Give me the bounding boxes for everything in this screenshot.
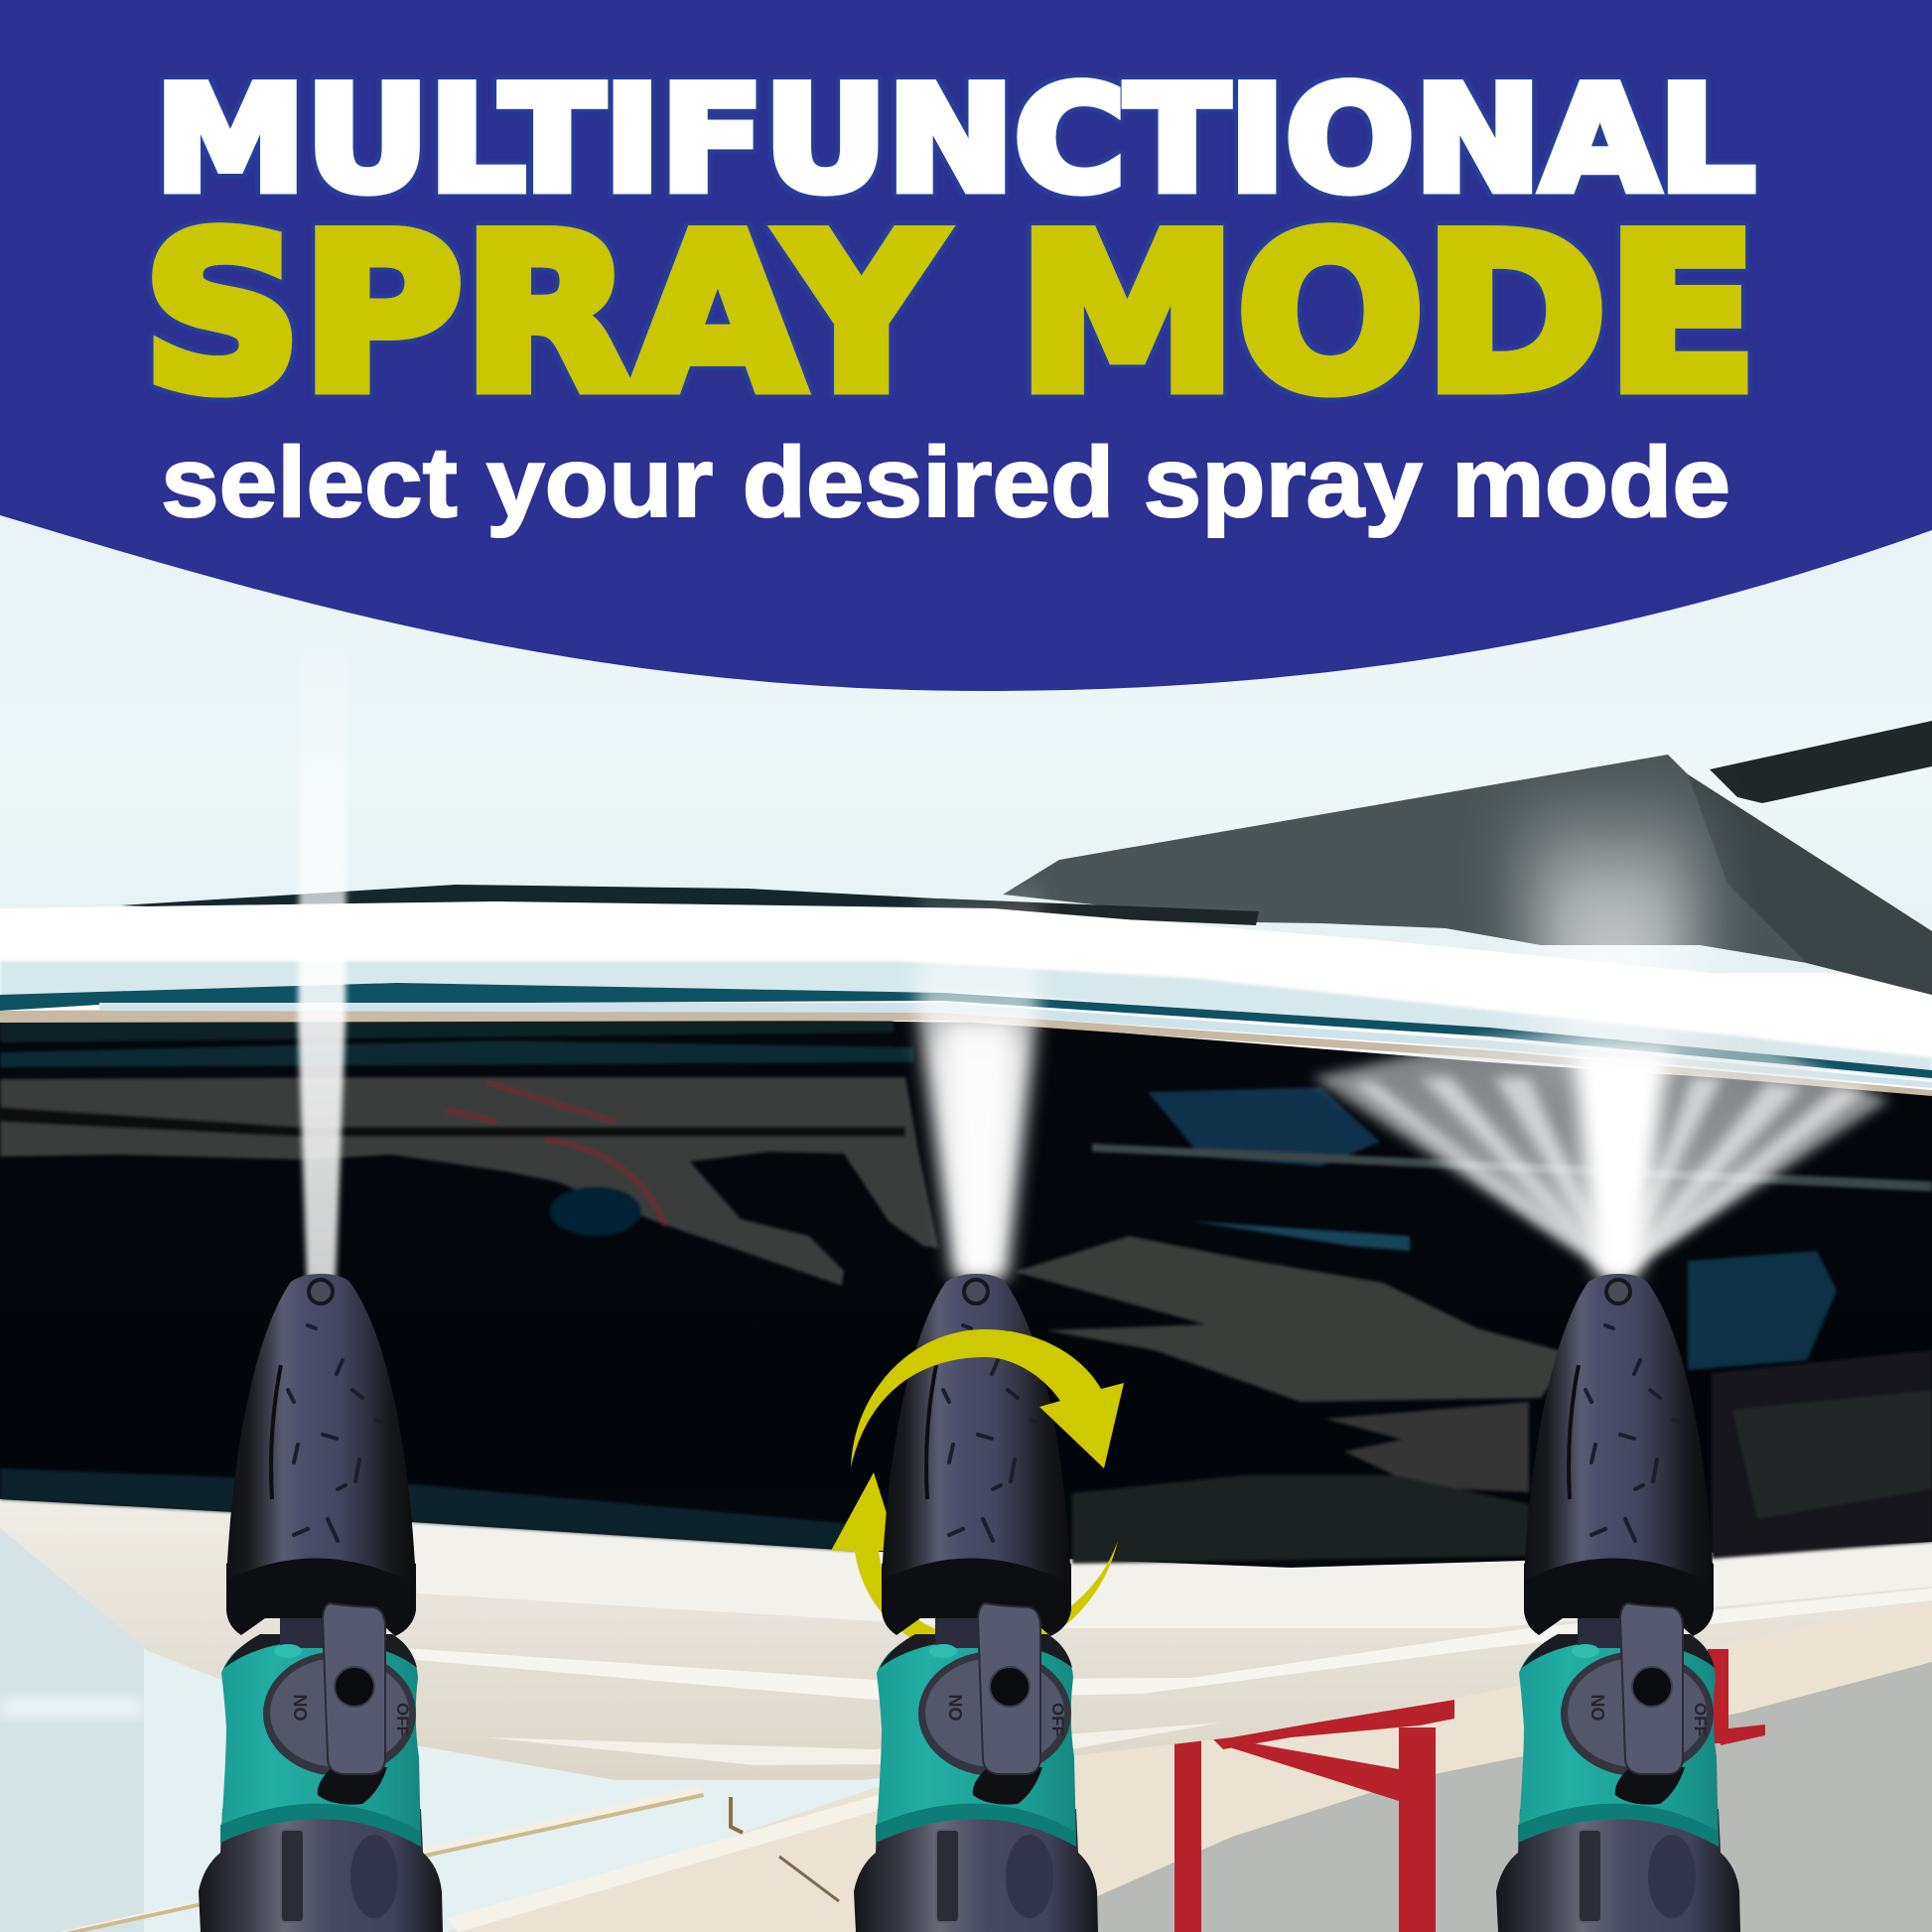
nozzle right [1496, 1274, 1740, 1932]
nozzle right: OFF [1691, 1703, 1710, 1736]
water and dock below the boat [0, 1489, 1932, 1932]
rotation arrow: upper arc [851, 1329, 1124, 1468]
nozzle right: NO [1587, 1694, 1607, 1722]
spray: medium cone jet [918, 874, 1042, 1279]
boat cover canopy [120, 721, 1932, 995]
subtitle: select your desired spray mode [161, 427, 1730, 538]
title: spray mode: SPRAY MODE [143, 190, 1757, 439]
nozzle left [199, 1274, 443, 1932]
nozzle center: OFF [1048, 1703, 1067, 1736]
boat dark hull [0, 1013, 1932, 1568]
hull reflections [0, 1018, 1932, 1564]
spray: wide fan jet [1312, 784, 1889, 1279]
title: multifunctional: MULTIFUNCTIONAL [155, 56, 1755, 224]
spray: narrow jet [298, 625, 347, 1279]
sky background [0, 496, 1932, 973]
boat lower white hull [0, 1499, 1932, 1780]
boat white rim [0, 901, 1932, 1096]
red boat stands [1174, 1649, 1765, 1932]
banner: curved header [0, 0, 1932, 691]
nozzle left: OFF [393, 1703, 412, 1736]
nozzle center: NO [945, 1694, 965, 1722]
nozzle center [854, 1274, 1098, 1932]
rotation arrow: lower arc [831, 1472, 1118, 1658]
nozzle left: NO [290, 1694, 310, 1722]
